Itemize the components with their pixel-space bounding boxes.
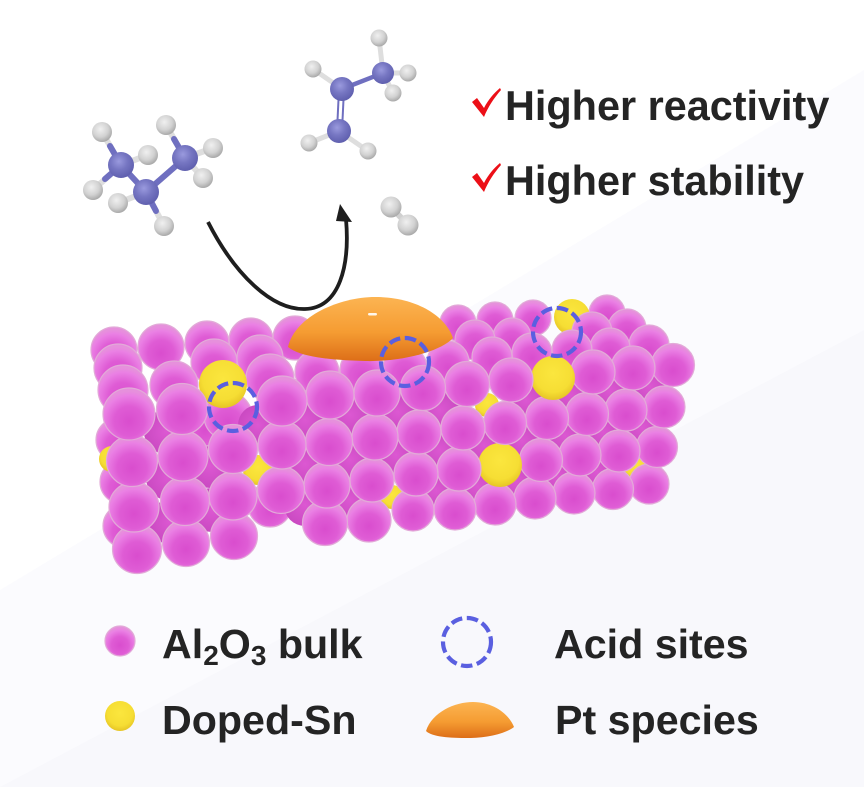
molecule: hydrogen bbox=[380, 196, 418, 236]
front face third row bbox=[109, 426, 678, 532]
legend label: Al2O3 bulk: 3 bbox=[251, 640, 266, 671]
check mark: stability bbox=[472, 163, 501, 192]
legend bbox=[105, 618, 759, 743]
embedded Sn atoms bbox=[99, 393, 647, 509]
reaction arrow bbox=[208, 204, 352, 309]
legend label: Al2O3 bulk: O bbox=[219, 621, 251, 667]
text: higher reactivity: Higher reactivity bbox=[505, 83, 829, 129]
front face second row bbox=[106, 386, 685, 486]
legend label: acid sites: Acid sites bbox=[554, 621, 749, 667]
acid site rings bbox=[209, 308, 581, 431]
text: higher stability: Higher stability bbox=[505, 158, 804, 204]
legend icon: Sn bbox=[105, 701, 135, 731]
molecule: product bbox=[300, 30, 416, 160]
legend label: Al2O3 bulk: bulk bbox=[266, 621, 363, 667]
Al2O3 lattice with doped Sn bbox=[91, 295, 694, 574]
molecule: reactant bbox=[83, 115, 223, 236]
legend label: Al2O3 bulk: 2 bbox=[203, 640, 219, 671]
back surface rows bbox=[91, 295, 669, 394]
front face top row bbox=[98, 344, 694, 440]
legend icon: Al2O3 bbox=[105, 626, 135, 656]
inner filler spheres bbox=[96, 367, 670, 548]
legend label: Al2O3 bulk: Al bbox=[162, 621, 203, 667]
Pt species particle bbox=[288, 297, 453, 361]
legend label: Pt species: Pt species bbox=[555, 697, 759, 743]
legend label: Doped-Sn: Doped-Sn bbox=[162, 697, 356, 743]
check mark: reactivity bbox=[472, 88, 501, 117]
legend icon: acid site bbox=[443, 618, 491, 666]
legend icon: Pt bbox=[426, 702, 514, 738]
front face bottom row bbox=[112, 464, 669, 574]
